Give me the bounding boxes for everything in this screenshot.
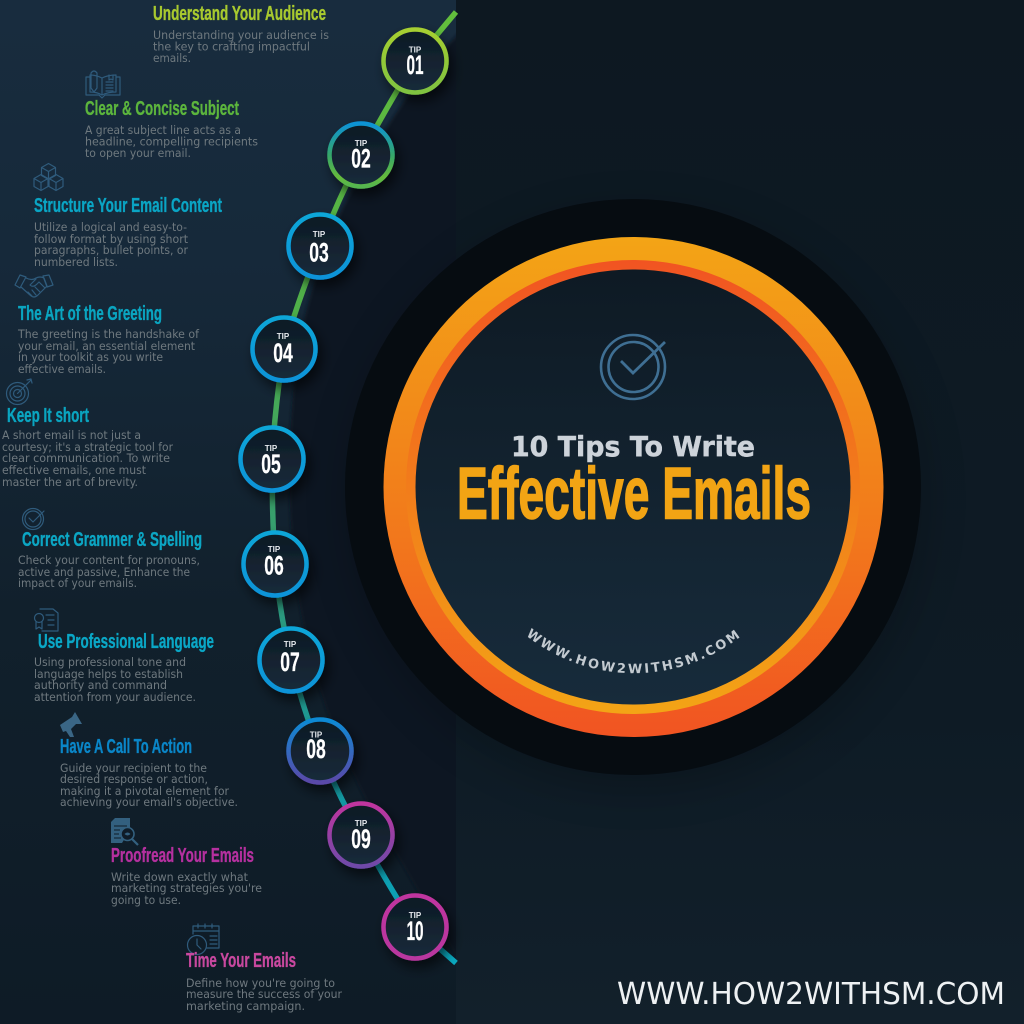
icon: handshake	[15, 275, 53, 297]
tip 06 marker	[244, 532, 306, 596]
body: tip 5: effective emails, one must	[2, 463, 146, 477]
body: tip 3: Utilize a logical and easy-to-	[34, 220, 187, 234]
panel: tip 7 text	[34, 609, 214, 704]
tip 09 marker: 09	[351, 824, 371, 854]
body: tip 8	[60, 761, 238, 809]
body: tip 6: Check your content for pronouns,	[18, 553, 200, 567]
body: tip 8: Guide your recipient to the	[60, 761, 207, 775]
body: tip 4: in your toolkit as you write	[18, 350, 163, 364]
heading: keep it short: Keep It short	[7, 405, 89, 427]
icon: check mark badge	[601, 335, 665, 399]
tip 05 marker	[240, 428, 304, 490]
body: tip 2	[85, 123, 258, 160]
panel: tip 8 text	[60, 712, 238, 809]
body: tip 1: the key to crafting impactful	[153, 40, 310, 54]
body: tip 9: going to use.	[111, 893, 181, 907]
body: tip 10	[186, 976, 342, 1013]
panel: tip 10 text	[186, 924, 342, 1013]
panel: tip 6 text	[18, 508, 202, 590]
body: tip 7: attention from your audience.	[34, 690, 196, 704]
tip 08 marker	[288, 720, 352, 782]
heading: have a call to action: Have A Call To Action	[60, 736, 192, 758]
body: tip 7: language helps to establish	[34, 667, 183, 681]
body: tip 5: A short email is not just a	[2, 428, 141, 442]
body: tip 3	[34, 220, 188, 269]
tip 08 marker: 08	[306, 734, 326, 764]
central badge	[345, 199, 921, 775]
body: tip 6: impact of your emails.	[18, 576, 137, 590]
icon: open book	[86, 71, 120, 98]
icon: certificate document	[34, 609, 58, 631]
shadow band beside timeline	[290, 22, 470, 980]
body: tip 8: making it a pivotal element for	[60, 784, 229, 798]
body: tip 2: A great subject line acts as a	[85, 123, 241, 137]
footer website text: WWW.HOW2WITHSM.COM	[617, 977, 1005, 1012]
tip 07 marker: 07	[280, 647, 300, 677]
tip 04 marker	[252, 318, 316, 380]
heading: use professional language: Use Professional Language	[38, 631, 214, 653]
tip 04 marker: 04	[273, 338, 293, 368]
tip 01 marker: TIP	[409, 46, 422, 54]
tip 02 marker: 02	[351, 144, 371, 174]
tip 10 marker: 10	[406, 916, 424, 946]
body: tip 2: to open your email.	[85, 146, 191, 160]
body: tip 3: numbered lists.	[34, 255, 118, 269]
body: tip 5: clear communication. To write	[2, 451, 170, 465]
tip 01 marker: 01	[406, 50, 424, 80]
body: tip 5: master the art of brevity.	[2, 475, 138, 489]
tip 09 marker: TIP	[355, 819, 368, 828]
tip 06 marker: TIP	[268, 545, 281, 554]
heading: the art of the greeting: The Art of the Greeting	[18, 303, 162, 325]
tip 01 marker	[384, 30, 446, 92]
icon: megaphone	[60, 712, 82, 737]
icon: document with magnifier	[111, 818, 138, 845]
body: tip 1: Understanding your audience is	[153, 28, 329, 42]
tip 02 marker	[330, 124, 392, 186]
tip 10 marker: TIP	[409, 911, 422, 920]
tip 07 marker	[260, 628, 322, 692]
tip 07 marker: TIP	[284, 640, 297, 649]
tip 03 marker	[288, 214, 352, 278]
timeline line	[272, 12, 456, 963]
body: tip 9: Write down exactly what	[111, 870, 248, 884]
body: tip 10: measure the success of your	[186, 987, 342, 1001]
panel: tips column	[0, 0, 456, 1024]
heading: structure your email content: Structure Your Email Content	[34, 195, 222, 217]
body: tip 7: Using professional tone and	[34, 655, 186, 669]
tip 03 marker: 03	[309, 238, 329, 268]
heading: correct grammer and spelling: Correct Grammer & Spelling	[22, 529, 202, 551]
panel: tip 1 text	[153, 3, 329, 65]
tip 09 marker	[330, 804, 392, 866]
body: tip 8: achieving your email's objective.	[60, 795, 238, 809]
panel: tip 2 text	[85, 71, 258, 160]
body: tip 9: marketing strategies you're	[111, 881, 262, 895]
heading: clear and concise subject: Clear & Concise Subject	[85, 98, 239, 120]
body: tip 8: desired response or action,	[60, 772, 208, 786]
tip 03 marker: TIP	[313, 230, 326, 239]
body: tip 1	[153, 28, 329, 65]
icon: calendar and clock	[188, 924, 219, 954]
icon: check badge	[22, 508, 44, 530]
body: tip 10: Define how you're going to	[186, 976, 335, 990]
tip 08 marker: TIP	[310, 730, 323, 740]
body: tip 6: active and passive, Enhance the	[18, 565, 190, 579]
body: tip 6	[18, 553, 200, 590]
tip 05 marker: TIP	[265, 444, 278, 453]
body: tip 7: authority and command	[34, 678, 167, 692]
panel: tip 9 text	[111, 818, 262, 907]
curved website text: WWW.HOW2WITHSM.COM	[528, 628, 740, 674]
tip 04 marker: TIP	[277, 332, 290, 341]
body: tip 10: marketing campaign.	[186, 999, 305, 1013]
body: tip 4: your email, an essential element	[18, 339, 195, 353]
body: tip 4: effective emails.	[18, 362, 106, 376]
tip 06 marker: 06	[264, 550, 284, 580]
title: 10 tips to write: 10 Tips To Write	[511, 430, 755, 463]
tip 02 marker: TIP	[355, 139, 368, 148]
icon: target	[6, 379, 32, 404]
panel: tip 3 text	[34, 164, 222, 269]
body: tip 3: follow format by using short	[34, 232, 188, 246]
panel: tip 4 text	[15, 275, 200, 376]
body: tip 5	[2, 428, 173, 489]
body: tip 4: The greeting is the handshake of	[17, 327, 200, 341]
tip 05 marker: 05	[261, 449, 281, 479]
body: tip 1: emails.	[153, 51, 191, 65]
icon: cubes	[34, 164, 63, 190]
heading: time your emails: Time Your Emails	[186, 950, 296, 972]
body: tip 2: headline, compelling recipients	[85, 134, 258, 148]
heading: understand your audience: Understand Your Audience	[153, 3, 326, 25]
body: tip 3: paragraphs, bullet points, or	[34, 243, 188, 257]
body: tip 7	[34, 655, 196, 704]
heading: proofread your emails: Proofread Your Emails	[111, 845, 254, 867]
body: tip 4	[17, 327, 200, 376]
panel: tip 5 text	[2, 379, 173, 489]
title: effective emails: Effective Emails	[457, 454, 811, 534]
body: tip 9	[111, 870, 262, 907]
tip 10 marker	[384, 896, 446, 958]
body: tip 5: courtesy; it's a strategic tool for	[2, 440, 173, 454]
